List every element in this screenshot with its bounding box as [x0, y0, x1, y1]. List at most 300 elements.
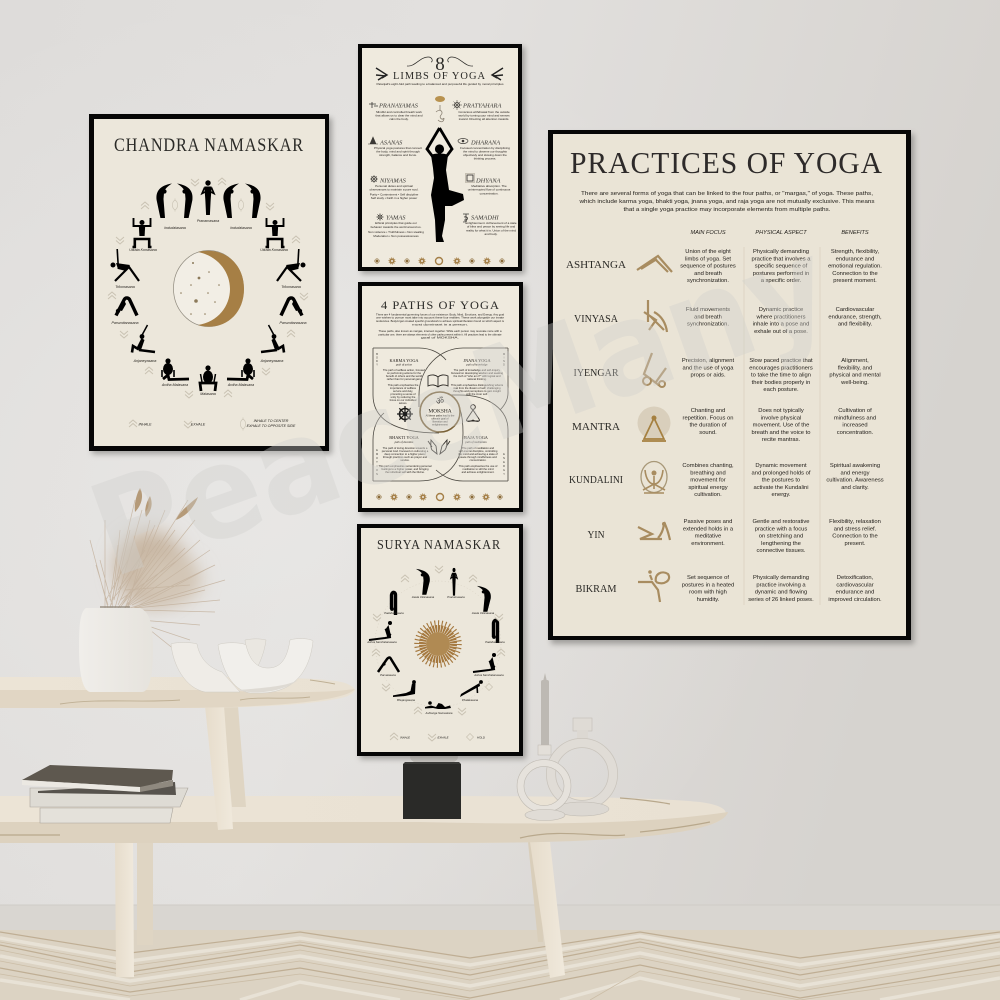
- side labels: O: [376, 468, 379, 472]
- path circle: Moksha: ultimate goal of: [432, 418, 449, 420]
- pose: Ardha Malasana right: [227, 358, 254, 387]
- side labels: O: [376, 456, 379, 460]
- intro text: goal of MOKSHA.: [421, 336, 459, 340]
- pose: Malasana: [200, 365, 216, 396]
- path: Raja Yoga: [458, 435, 498, 474]
- row: Mantra: Cultivation of: [838, 408, 872, 414]
- breath direction chevrons: [372, 566, 505, 715]
- row: Bikram: [576, 570, 882, 603]
- pose labels: Padahastasana: [485, 640, 505, 644]
- title: Practices of Yoga: PRACTICES OF YOGA: [570, 145, 883, 180]
- poster: 8 Limbs of Yoga: [358, 44, 525, 274]
- pose: Parsvottanasana right: Parsvottanasana: [280, 321, 306, 325]
- pose: Anjaneyasana left: Anjaneyasana: [133, 359, 156, 363]
- pose: Trikonasana left: Trikonasana: [115, 285, 135, 289]
- row: Yin: extended holds in a: [683, 526, 734, 532]
- pose labels: Ashtanga Namaskara: [425, 711, 453, 715]
- side labels: I: [504, 356, 505, 360]
- side labels: N: [376, 472, 378, 476]
- limb: Dhyana: uninterrupted flow of continuous: [468, 188, 511, 192]
- row: Ashtanga: ASHTANGA: [566, 260, 626, 271]
- limb: Pratyahara: [452, 100, 510, 121]
- path: Jnana Yoga: focused on developing wisdom and seeking: [451, 371, 503, 375]
- intro text: that a single yoga practice may incorporate elements from multiple paths.: [624, 207, 831, 213]
- row: Kundalini: the postures to: [762, 478, 800, 484]
- row: Iyengar: props or aids.: [690, 373, 726, 379]
- pose: Bhujangasana: [393, 680, 416, 697]
- limb: Yamas: Moderation • Non possessiveness: [373, 234, 419, 238]
- row: Mantra: MANTRA: [572, 422, 620, 433]
- row: Kundalini: Dynamic movement: [755, 463, 807, 469]
- pose: Indudalasana right: Indudalasana: [230, 226, 252, 230]
- path: Jnana Yoga: with the inner self.: [466, 392, 488, 396]
- pose: Trikonasana right: Trikonasana: [281, 285, 301, 289]
- path: Bhakti Yoga: deep connection to a higher power: [384, 452, 426, 456]
- limb: Asanas: strength, balance and focus.: [379, 153, 417, 157]
- icon: left leaf sprig: [376, 68, 387, 80]
- limb: Asanas: [368, 137, 422, 157]
- row: Kundalini: activate the Kundalini: [753, 485, 809, 491]
- side labels: E: [503, 452, 505, 456]
- row: Ashtanga: sequence of postures: [680, 264, 736, 270]
- path: Jnana Yoga: This path emphasizes distinguishing what is: [451, 383, 504, 387]
- pose: Hasta Uttanasana right: [477, 586, 491, 612]
- row: Yin: Passive poses and: [684, 519, 732, 525]
- limb: Samadhi: SAMADHI: [471, 214, 500, 222]
- limb: Dharana: objectively and slowing down the: [463, 153, 507, 157]
- row: Bikram: postures in a heated: [682, 582, 734, 588]
- side labels: E: [376, 448, 378, 452]
- path: Karma Yoga: importance of selfless: [390, 386, 417, 390]
- row: Vinyasa: synchronization.: [687, 322, 729, 328]
- path circle: Moksha: MOKSHA: [428, 408, 452, 414]
- row: Bikram: practice involving a: [756, 582, 806, 588]
- title: Limbs of Yoga: LIMBS OF YOGA: [393, 71, 486, 82]
- row: Bikram: cardiovascular: [836, 582, 874, 588]
- row: Bikram: BIKRAM: [576, 584, 617, 595]
- row: Ashtanga: present moment.: [833, 278, 877, 284]
- row: Iyengar: Precision, alignment: [682, 358, 734, 364]
- diagram: four interlocking petals: [373, 348, 508, 481]
- path: Karma Yoga: KARMA YOGA: [389, 358, 419, 363]
- intro text: one wishes to pursue must take into account these four realities. These work alongside our innate: [376, 316, 504, 320]
- limb: Pranayamas: Mindful and controlled breath work: [376, 110, 422, 114]
- path: Bhakti Yoga: This path emphasizes surrendering personal: [378, 464, 432, 468]
- row: Mantra: movement. Use of the: [753, 423, 809, 429]
- limb: Dhyana: [466, 174, 511, 195]
- table headers: [690, 230, 869, 236]
- side labels: M: [503, 352, 506, 356]
- legend: [390, 733, 485, 741]
- row: Kundalini: movement for: [690, 478, 726, 484]
- title: Chandra Namaskar: CHANDRA NAMASKAR: [114, 135, 304, 156]
- pose: Anjaneyasana right: [260, 325, 284, 363]
- limb: Dharana: [458, 138, 510, 160]
- row: Bikram: humidity.: [697, 597, 720, 603]
- row: Yin: lengthening the: [761, 541, 801, 547]
- path: Karma Yoga: The path of selfless action, focused: [383, 368, 426, 372]
- row: Iyengar: well-being.: [840, 380, 869, 386]
- path: Karma Yoga: rather than for personal gain.: [387, 377, 422, 381]
- pose labels: Padahastasana: [384, 611, 404, 615]
- path: Karma Yoga: This path emphasizes the: [388, 383, 419, 387]
- path: Bhakti Yoga: service.: [400, 458, 410, 462]
- row: Yin: Flexibility, relaxation: [829, 519, 881, 525]
- limb: Dhyana: concentration.: [480, 191, 499, 195]
- pose labels: Hasta Uttanasana: [472, 611, 495, 615]
- row: Bikram: improved circulation.: [828, 597, 882, 603]
- side labels: B: [376, 352, 378, 356]
- row: Yin: and stress relief.: [834, 526, 877, 532]
- path: Karma Yoga: service and duty,: [393, 389, 413, 393]
- row: Vinyasa: VINYASA: [574, 314, 618, 325]
- row: Iyengar: and the use of yoga: [683, 365, 734, 371]
- path: Bhakti Yoga: the individual self with the Divine.: [385, 470, 425, 474]
- limb: Pranayamas: PRANAYAMAS: [378, 102, 419, 110]
- row: Kundalini: and prolonged holds of: [752, 470, 811, 476]
- row: Vinyasa: and flexibility.: [838, 322, 873, 328]
- row: Ashtanga: endurance and: [836, 256, 874, 262]
- pose: Trikonasana right: [277, 249, 306, 289]
- row: Ashtanga: synchronization.: [687, 278, 729, 284]
- legend: [129, 418, 296, 430]
- pose: Ashva Sanchalanasana right: [473, 653, 496, 672]
- pose: Indudalasana left: [156, 184, 193, 230]
- intro text: There are several forms of yoga that can be linked to the four paths, or "margas," of yoga. These paths,: [581, 191, 873, 197]
- row: Mantra: increased: [842, 423, 868, 429]
- icon: sun: [417, 623, 459, 665]
- row: Yin: meditative: [695, 534, 721, 540]
- path: Bhakti Yoga: The path of loving devotion towards a: [383, 446, 428, 450]
- pose: Anjaneyasana left: [132, 325, 156, 363]
- row: Vinyasa: where practitioners: [756, 314, 806, 320]
- limb: Dhyana: Meditative absorption. The: [471, 184, 507, 188]
- pose: Ashva Sanchalanasana left: [369, 621, 392, 640]
- object: U-shaped ceramic holders: [171, 639, 313, 693]
- intro text: particular one, there are always elements of other paths present within it. All practices lead to the ultimate: [378, 332, 502, 336]
- limb: Yamas: YAMAS: [386, 214, 406, 222]
- pose labels: Pranamasana: [447, 595, 465, 599]
- upper table: [0, 677, 355, 708]
- row: Kundalini: KUNDALINI: [569, 475, 623, 486]
- subtitle: Patanjali's eight-fold path leading to a balanced and purposeful life guided by moral principles: [376, 82, 504, 86]
- pose labels: Hasta Uttanasana: [412, 595, 435, 599]
- path: Raja Yoga: This path emphasizes the use of: [459, 464, 498, 468]
- table headers: MAIN FOCUS: [690, 230, 726, 236]
- intro text: tendencies. Body/organ created specific groundwork to achieve spiritual liberation found on which aspect is: [376, 319, 504, 323]
- limb: Samadhi: Enlightenment. Achievement of a state: [465, 221, 517, 225]
- object: black cube pedestal: [403, 748, 461, 819]
- side labels: D: [503, 362, 505, 366]
- pose: Parsvottanasana left: Parsvottanasana: [112, 321, 138, 325]
- path: Karma Yoga: focus on our individual: [390, 398, 417, 402]
- table headers: PHYSICAL ASPECT: [755, 230, 807, 236]
- row: Iyengar: physical and mental: [829, 373, 881, 379]
- path: Jnana Yoga: thoughts and perceptions to gain insight: [453, 389, 501, 393]
- heading numeral: 8 with flourishes: [407, 54, 473, 75]
- row: Bikram: Physically demanding: [753, 575, 809, 581]
- baseboard: [0, 905, 1000, 931]
- poster: 4 Paths of Yoga: [358, 282, 526, 515]
- limb: Samadhi: [463, 214, 517, 236]
- path: Bhakti Yoga: through practices such as prayer and: [383, 455, 428, 459]
- figure: woman in tree pose: [427, 128, 464, 242]
- limb: Dharana: Focused concentration by disciplining: [460, 146, 510, 150]
- path: Raja Yoga: and achieve enlightenment.: [462, 470, 495, 474]
- row: Yin: Connection to the: [832, 534, 878, 540]
- legend: INHALE: [139, 422, 152, 426]
- lower table: [0, 796, 728, 843]
- limb: Dharana: the mind to observe our thoughts: [463, 150, 507, 154]
- pose: Pranamasana: [197, 180, 219, 223]
- side labels: Y: [503, 472, 505, 476]
- row: Bikram: Set sequence of: [687, 575, 729, 581]
- row: Iyengar: [574, 353, 881, 393]
- path: Bhakti Yoga: feelings to a higher power, and bringing: [382, 467, 429, 471]
- row: Ashtanga: Union of the eight: [685, 249, 731, 255]
- row: Ashtanga: emotional regulation.: [828, 264, 882, 270]
- object: candle holders: [520, 673, 613, 820]
- poster: Practices of Yoga: [548, 130, 914, 644]
- woven herringbone floor: [0, 930, 1000, 1000]
- path: Karma Yoga: selves.: [399, 401, 407, 405]
- path: Karma Yoga: on performing actions for the: [387, 371, 422, 375]
- row: Vinyasa: Cardiovascular: [836, 307, 874, 313]
- path: Jnana Yoga: [451, 358, 504, 396]
- limb: Samadhi: reality for what it is. Union of the mind: [466, 228, 516, 232]
- intro text: most dominant in a person.: [412, 322, 468, 326]
- pose: Hasta Uttanasana left: [416, 569, 430, 595]
- column dividers: [744, 247, 820, 605]
- row: Iyengar: IYENGAR: [574, 368, 618, 379]
- row: Kundalini: and clarity.: [841, 485, 869, 491]
- pose labels: Ashva Sanchalanasana: [473, 673, 504, 677]
- table headers: BENEFITS: [841, 230, 869, 236]
- limb: Dharana: DHARANA: [470, 140, 500, 146]
- row: Mantra: [572, 406, 876, 443]
- object: white vase: [79, 607, 153, 692]
- path circle: Moksha: enlightenment: [432, 424, 448, 426]
- limb: Samadhi: of bliss and peace by seeing life and: [467, 225, 516, 229]
- pose: Ardha Malasana right: Ardha Malasana: [227, 383, 254, 387]
- limb: Pranayamas: [369, 102, 423, 121]
- pose: Ashtanga Namaskara: [425, 701, 451, 709]
- row: Kundalini: Combines chanting,: [682, 463, 734, 469]
- pose labels: Phalakasana: [462, 698, 479, 702]
- row: Mantra: Does not typically: [758, 408, 804, 414]
- limb: Yamas: behavior towards the world around us.: [371, 225, 422, 229]
- limb: Pranayamas: calm the body.: [389, 117, 409, 121]
- legend: EXHALE: [437, 736, 449, 740]
- ornament row: [375, 258, 504, 264]
- legend: EXHALE: [191, 422, 206, 426]
- limb: Samadhi: and body.: [485, 232, 498, 236]
- pose: Utkata Konasana left: Utkata Konasana: [129, 248, 157, 252]
- pose labels: Ashva Sanchalanasana: [366, 640, 397, 644]
- path: Bhakti Yoga: personal God. Focused on cultivating a: [382, 449, 429, 453]
- row: Yin: connective tissues.: [757, 548, 806, 554]
- path circle: Moksha: ॐ: [436, 396, 444, 407]
- poster: Surya Namaskar: [357, 524, 526, 759]
- intro text: These paths, also known as margas, intersect together. While each person may resonate more with a: [378, 329, 502, 333]
- row: Yin: environment.: [691, 541, 725, 547]
- icon: moon with stars: [174, 250, 244, 327]
- row: Ashtanga: postures performed in: [753, 271, 809, 277]
- path: Raja Yoga: meditation to still the mind: [462, 467, 494, 471]
- pose labels: Bhujangasana: [397, 698, 415, 702]
- pose: Indudalasana left: Indudalasana: [164, 226, 186, 230]
- pose: Indudalasana right: [223, 184, 261, 230]
- object: pampas grass: [90, 488, 225, 650]
- pose: Utkata Konasana left: [129, 218, 157, 252]
- side labels: T: [376, 460, 378, 464]
- path: Raja Yoga: path of meditation: [464, 440, 487, 444]
- pose: Pranamasana: [451, 568, 457, 596]
- row: Iyengar: to take the time to align: [751, 373, 811, 379]
- path: Jnana Yoga: path of knowledge: [465, 362, 488, 366]
- pose: Parsvottanasana left: [112, 298, 138, 325]
- limb: Pratyahara: PRATYAHARA: [462, 102, 501, 110]
- limb: Dharana: thinking process.: [474, 156, 496, 160]
- icon: open book: [428, 375, 448, 387]
- row: Mantra: mindfulness and: [834, 415, 876, 421]
- icon: right leaf sprig: [492, 68, 503, 80]
- icon: dharma wheel: [397, 406, 413, 422]
- intro text: [578, 191, 875, 213]
- object: books stack: [22, 765, 188, 823]
- limb: Niyamas: Self study • Faith in a higher power: [371, 196, 417, 200]
- path: Raja Yoga: concentration.: [470, 458, 487, 462]
- limb: Asanas: Physical yoga postures that connect: [374, 146, 422, 150]
- pose: Pranamasana: Pranamasana: [197, 219, 219, 223]
- limb: Asanas: the body, mind and spirit through: [376, 150, 420, 154]
- row: Vinyasa: and breath: [694, 314, 722, 320]
- title: 4 Paths of Yoga: 4 PATHS OF YOGA: [381, 298, 500, 312]
- legend: INHALE TO CENTER: [254, 419, 289, 423]
- path: Raja Yoga: The path of meditation and: [462, 446, 494, 450]
- limb: Yamas: [368, 213, 424, 238]
- path circle: Moksha: [420, 392, 460, 432]
- dotted circle path: [375, 581, 501, 707]
- row: Kundalini: breathing and: [690, 470, 726, 476]
- row: Mantra: breath and the voice to: [752, 430, 810, 436]
- legend: EXHALE TO OPPOSITE SIDE: [247, 424, 296, 428]
- path: Karma Yoga: benefit of others and the world: [386, 374, 423, 378]
- title: Surya Namaskar: SURYA NAMASKAR: [377, 538, 501, 553]
- row: Bikram: room with high: [689, 590, 727, 596]
- lower table legs: [115, 838, 565, 978]
- icon: meditating figure: [467, 405, 479, 421]
- pose: Phalakasana: [460, 680, 483, 697]
- row: Ashtanga: [566, 249, 882, 284]
- pose: Parvatasana: [378, 658, 399, 672]
- poster: Chandra Namaskar: [89, 114, 332, 454]
- pose: Utkata Konasana right: [260, 218, 288, 252]
- limb: Niyamas: Personal duties and spiritual: [375, 184, 413, 188]
- legend: INHALE: [400, 736, 410, 740]
- row: Vinyasa: endurance, strength,: [828, 314, 882, 320]
- path: Raja Yoga: the mind and achieving a state of: [458, 452, 498, 456]
- side labels: I: [377, 464, 378, 468]
- limb: Niyamas: observances to maintain a pure soul.: [369, 188, 419, 192]
- row: Yin: on stretching and: [759, 534, 803, 540]
- row: Ashtanga: specific sequence of: [755, 264, 808, 270]
- row: Vinyasa: exhale out of a pose.: [754, 329, 808, 335]
- row: Ashtanga: a specific order.: [761, 278, 802, 284]
- heading numeral: 8 with flourishes: 8: [435, 54, 445, 75]
- limb: Yamas: Non violence • Truthfulness • Non stealing: [368, 230, 424, 234]
- pose: Ardha Malasana left: Ardha Malasana: [161, 383, 188, 387]
- row: Bikram: dynamic and flowing: [755, 590, 807, 596]
- row: Ashtanga: and breath: [694, 271, 722, 277]
- ornament row: [377, 494, 502, 500]
- side labels: R: [503, 464, 505, 468]
- row: Ashtanga: practice that involves a: [752, 256, 811, 262]
- row: Bikram: series of 26 linked poses.: [748, 597, 814, 603]
- pose labels: [366, 595, 505, 715]
- path: Karma Yoga: [383, 358, 426, 405]
- row: Mantra: concentration.: [837, 430, 874, 436]
- icon: chakra symbol: [436, 105, 444, 122]
- row: Vinyasa: Dynamic practice: [759, 307, 803, 313]
- pose: Trikonasana left: [110, 249, 139, 289]
- side labels: E: [503, 460, 505, 464]
- row: Mantra: involve physical: [761, 415, 801, 421]
- path: Raja Yoga: self-mental discipline, controlling: [459, 449, 498, 453]
- row: Kundalini: Spiritual awakening: [830, 463, 880, 469]
- path: Raja Yoga: peace through mindfulness and: [459, 455, 497, 459]
- row: Kundalini: cultivation. Awareness: [826, 478, 884, 484]
- limb: Asanas: ASANAS: [379, 140, 403, 146]
- pose: Padahastasana left: [390, 592, 396, 615]
- intro text: There are 4 fundamental governing forces of our existence: Body, Mind, Emotions, and Energy. Any goal: [376, 312, 504, 316]
- path: Raja Yoga: RAJA YOGA: [464, 435, 489, 440]
- row: Iyengar: their bodies properly in: [752, 380, 810, 386]
- row: Bikram: Detoxification,: [837, 575, 874, 581]
- path: Jnana Yoga: JNANA YOGA: [463, 358, 491, 363]
- limb: Pranayamas: that allows us to clear the mind and: [375, 114, 423, 118]
- row: Yin: [588, 519, 881, 554]
- row: Mantra: Chanting and: [691, 408, 725, 414]
- row: Kundalini: [569, 462, 884, 498]
- pose: Padahastasana right: [492, 620, 498, 643]
- limb: Yamas: Ethical principles that guide our: [375, 221, 417, 225]
- row: Yin: Gentle and restorative: [752, 519, 810, 525]
- side labels: Y: [376, 362, 378, 366]
- path: Jnana Yoga: rational thinking.: [467, 377, 487, 381]
- side labels: [376, 352, 506, 476]
- row: Iyengar: flexibility, and: [838, 365, 872, 371]
- row: Kundalini: spiritual energy: [688, 485, 728, 491]
- limb: Pratyahara: world by turning your mind and senses: [458, 114, 510, 118]
- row: Kundalini: energy.: [772, 492, 791, 498]
- path: Bhakti Yoga: path of devotion: [394, 440, 414, 444]
- path: Karma Yoga: path of action: [395, 362, 413, 366]
- pose: Malasana: Malasana: [200, 392, 216, 396]
- path: Jnana Yoga: The path of knowledge and self-inquiry,: [454, 368, 501, 372]
- icon: praying hands: [428, 440, 450, 454]
- row: Kundalini: and energy: [840, 470, 870, 476]
- intro text: [376, 312, 504, 340]
- side labels: D: [376, 359, 378, 363]
- row: Vinyasa: [574, 300, 882, 335]
- limb: Pratyahara: Conscious withdrawal from the outside: [458, 110, 510, 114]
- row: Iyengar: each posture.: [763, 387, 799, 393]
- limb: Dhyana: DHYANA: [475, 178, 501, 184]
- pose: Utkata Konasana right: Utkata Konasana: [260, 248, 288, 252]
- limb: Niyamas: NIYAMAS: [379, 178, 407, 184]
- pose: Ardha Malasana left: [161, 358, 189, 387]
